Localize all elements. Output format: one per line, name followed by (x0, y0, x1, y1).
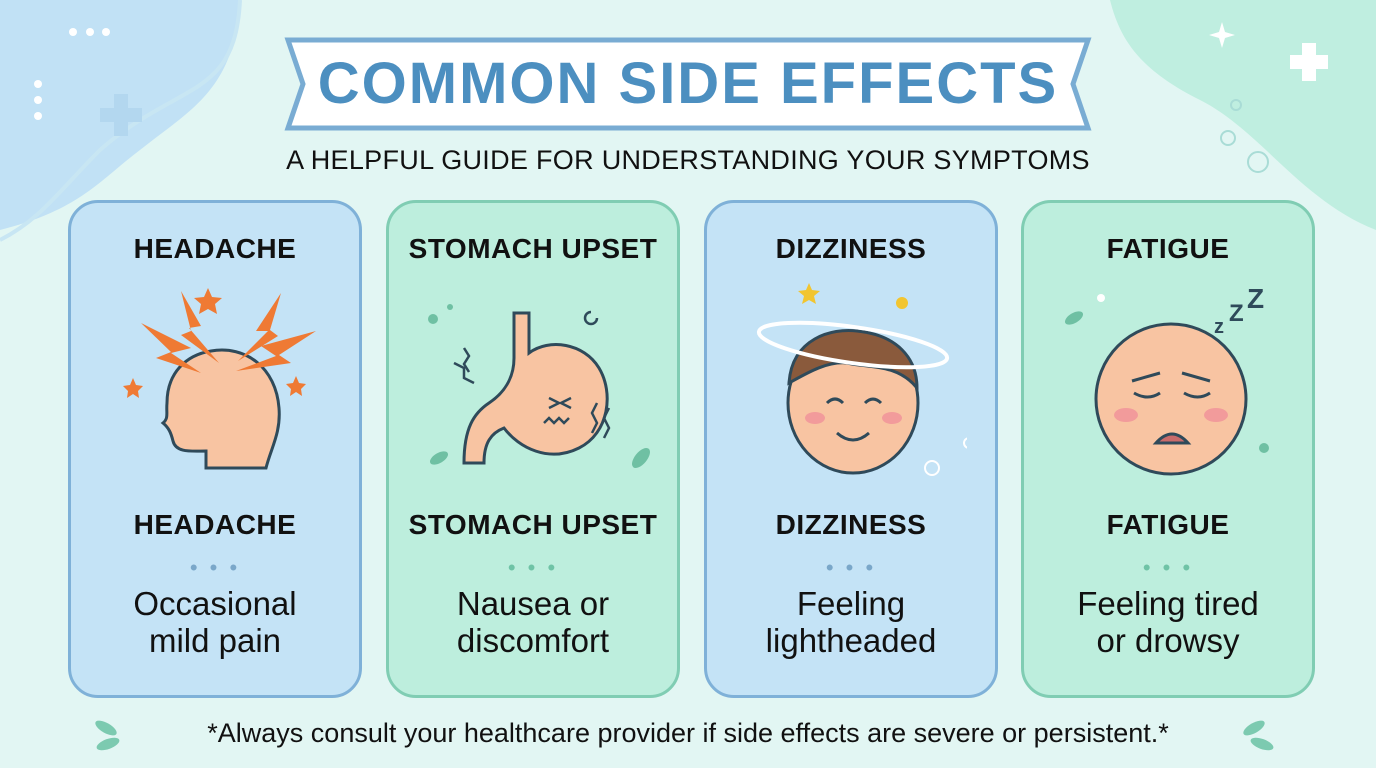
subtitle: A HELPFUL GUIDE FOR UNDERSTANDING YOUR SYMPTOMS (286, 145, 1090, 175)
title banner: COMMON SIDE EFFECTS (318, 51, 1058, 116)
panel: dizziness: DIZZINESS (776, 233, 926, 264)
icon: stomach (428, 304, 650, 468)
footer note: *Always consult your healthcare provider if side effects are severe or persistent.* (207, 718, 1169, 748)
panel: headache (68, 200, 362, 698)
panel: dizziness: lightheaded (766, 622, 936, 659)
icon: headache (123, 288, 316, 470)
panel: dizziness (704, 200, 998, 698)
icon: tired face: Z (1229, 300, 1244, 327)
panel: headache: HEADACHE (134, 233, 296, 264)
dots: • • • (508, 555, 558, 580)
panel: stomach upset: discomfort (457, 622, 609, 659)
dots: • • • (190, 555, 240, 580)
icon: dizzy face (756, 283, 967, 476)
panel: dizziness: Feeling (797, 585, 905, 622)
panel: headache: HEADACHE (134, 509, 296, 540)
panel: stomach upset (386, 200, 680, 698)
panel: stomach upset: STOMACH UPSET (409, 233, 657, 264)
panel: headache: Occasional (133, 585, 297, 622)
panel: stomach upset: Nausea or (457, 585, 609, 622)
panel: fatigue: Feeling tired (1077, 585, 1259, 622)
dots: • • • (1143, 555, 1193, 580)
panel: fatigue: or drowsy (1096, 622, 1240, 659)
panel: stomach upset: STOMACH UPSET (409, 509, 657, 540)
panel: dizziness: DIZZINESS (776, 509, 926, 540)
dots: • • • (826, 555, 876, 580)
icon: tired face (1065, 283, 1269, 476)
panel: fatigue: FATIGUE (1107, 509, 1229, 540)
panel: headache: mild pain (149, 622, 281, 659)
panel: fatigue (1021, 200, 1315, 698)
panel: fatigue: FATIGUE (1107, 233, 1229, 264)
icon: tired face: Z (1247, 283, 1264, 314)
icon: tired face: z (1214, 316, 1224, 338)
title banner (284, 38, 1092, 130)
